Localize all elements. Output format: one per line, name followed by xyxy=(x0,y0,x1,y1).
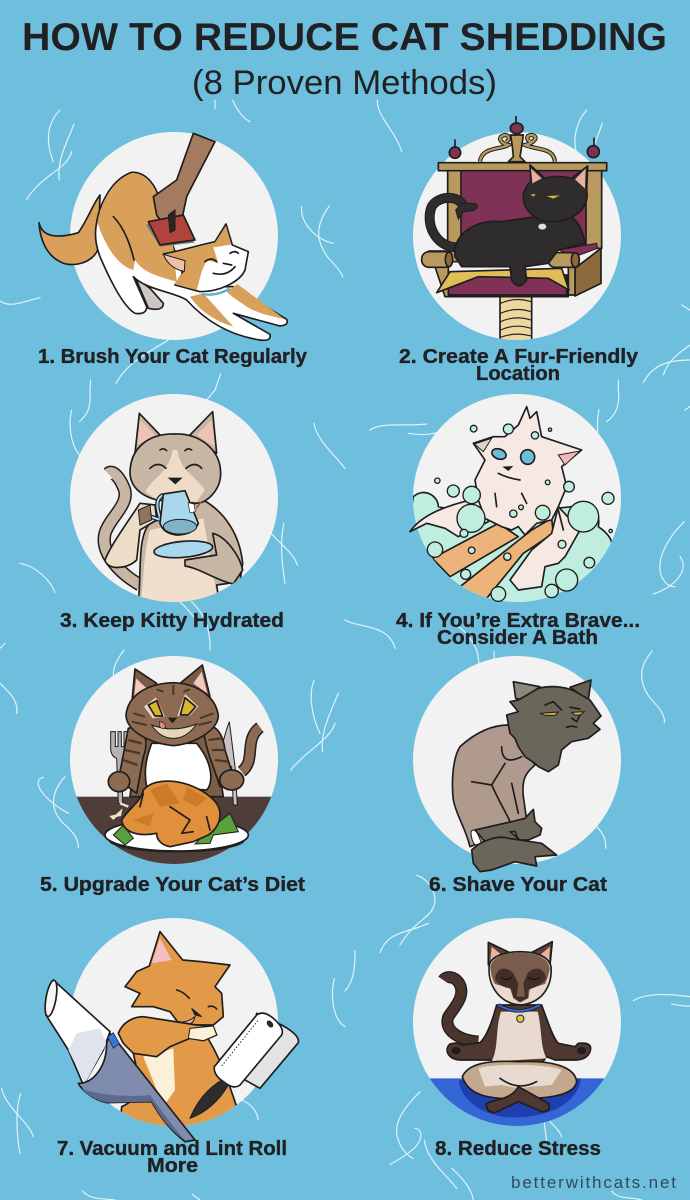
icon: striped tail xyxy=(104,472,140,585)
icon: ear left xyxy=(513,682,540,700)
icon: black cat xyxy=(430,165,588,286)
icon: knife xyxy=(221,722,237,805)
icon: brush xyxy=(146,220,195,247)
label 2: Location xyxy=(476,363,560,385)
panel: 6 shave your cat xyxy=(413,656,621,896)
icon: ears xyxy=(135,412,217,453)
icon: cat head xyxy=(163,224,248,292)
icon: table xyxy=(76,796,272,864)
illustration: cat with roast turkey xyxy=(67,656,283,867)
icon: cat body xyxy=(138,500,243,607)
icon: hand and arm xyxy=(153,133,215,232)
icon: right arm xyxy=(185,533,243,584)
panel: 1 brush your cat xyxy=(38,132,308,368)
icon: lint roller xyxy=(245,1013,298,1088)
label 8: 8. Reduce Stress xyxy=(435,1138,601,1160)
icon: fork xyxy=(111,732,127,804)
icon: soap bubbles xyxy=(427,424,614,601)
icon: roller handle xyxy=(190,1080,228,1118)
icon: licking arm xyxy=(118,1017,217,1057)
illustration: cat on a throne xyxy=(413,117,621,342)
panel: 4 consider a bath xyxy=(395,394,640,649)
label 5: 5. Upgrade Your Cat’s Diet xyxy=(40,874,305,896)
label 7 xyxy=(57,1138,287,1177)
icon: cat torso xyxy=(130,733,223,797)
label 4: Consider A Bath xyxy=(437,627,598,649)
icon: fluffy tail xyxy=(472,837,557,872)
website credit: betterwithcats.net xyxy=(511,1173,676,1192)
icon: throne seat xyxy=(422,243,601,297)
label 4 xyxy=(396,610,640,649)
icon: ears xyxy=(132,665,210,705)
icon: arms holding cat xyxy=(432,523,518,577)
icon: blue collar with tag xyxy=(498,1005,540,1011)
subtitle: (8 Proven Methods) xyxy=(192,64,497,102)
icon: ear right xyxy=(570,680,591,700)
icon: head xyxy=(489,952,551,1005)
icon: far hind leg xyxy=(135,277,163,309)
panel: 8 reduce stress xyxy=(408,918,625,1160)
icon: crossed legs xyxy=(462,1061,577,1099)
icon: head xyxy=(130,434,221,503)
icon: furry head xyxy=(507,687,601,772)
title: HOW TO REDUCE CAT SHEDDING xyxy=(22,16,667,59)
icon: orange fur patches xyxy=(98,173,285,327)
icon: cat torso xyxy=(120,1039,237,1126)
icon: blue mug xyxy=(151,495,163,520)
icon: blue yoga mat xyxy=(430,1078,604,1126)
panel: 2 fur-friendly location xyxy=(399,117,639,385)
icon: cat head xyxy=(126,683,218,746)
panel: 7 vacuum and lint roll xyxy=(43,918,298,1177)
label 3: 3. Keep Kitty Hydrated xyxy=(60,610,284,632)
icon: plate xyxy=(108,827,245,853)
illustration: cat being brushed xyxy=(39,132,287,340)
label 2 xyxy=(399,346,639,385)
icon: cat tail xyxy=(39,195,100,265)
label 7: More xyxy=(147,1155,198,1177)
icon: shaved body xyxy=(452,725,535,847)
icon: left arm xyxy=(105,503,157,567)
icon: parsley xyxy=(113,813,238,845)
icon: cat head xyxy=(125,932,230,1025)
icon: wet white cat xyxy=(410,407,582,590)
icon: throne back xyxy=(438,163,607,262)
label 7: 7. Vacuum and Lint Roll xyxy=(57,1138,287,1160)
icon: white foot mark xyxy=(471,830,482,845)
label 2: 2. Create A Fur-Friendly xyxy=(399,346,639,368)
panel: 5 upgrade diet xyxy=(40,656,305,896)
icon: bones xyxy=(112,803,128,818)
icon: arms with paws xyxy=(118,727,146,793)
icon: torso and arms xyxy=(447,1005,591,1063)
illustration: cat with vacuum and lint roller xyxy=(43,918,298,1142)
icon: vacuum hose xyxy=(46,980,110,1085)
icon: scratching post xyxy=(500,295,532,342)
icon: fluffy paws xyxy=(475,809,542,842)
icon: ears xyxy=(488,942,552,965)
illustration: cat drinking tea xyxy=(70,394,278,607)
icon: saucer xyxy=(153,539,213,560)
label 4: 4. If You’re Extra Brave... xyxy=(396,610,640,632)
icon: vacuum body xyxy=(78,1033,195,1142)
icon: blue collar xyxy=(202,288,230,295)
illustration: meditating siamese cat xyxy=(408,918,625,1130)
panel: 3 keep kitty hydrated xyxy=(60,394,284,632)
icon: roast turkey xyxy=(122,781,220,847)
icon: throne crown xyxy=(449,117,599,162)
icon: tail xyxy=(242,727,260,772)
icon: foam water xyxy=(413,492,612,602)
label 1: 1. Brush Your Cat Regularly xyxy=(38,346,308,368)
icon: cat body xyxy=(95,172,287,340)
icon: grumpy eyes xyxy=(540,712,558,715)
icon: tail xyxy=(443,977,478,1042)
illustration: shaved grumpy cat xyxy=(413,656,621,872)
illustration: soapy cat in bath xyxy=(409,394,621,602)
label 6: 6. Shave Your Cat xyxy=(429,874,607,896)
